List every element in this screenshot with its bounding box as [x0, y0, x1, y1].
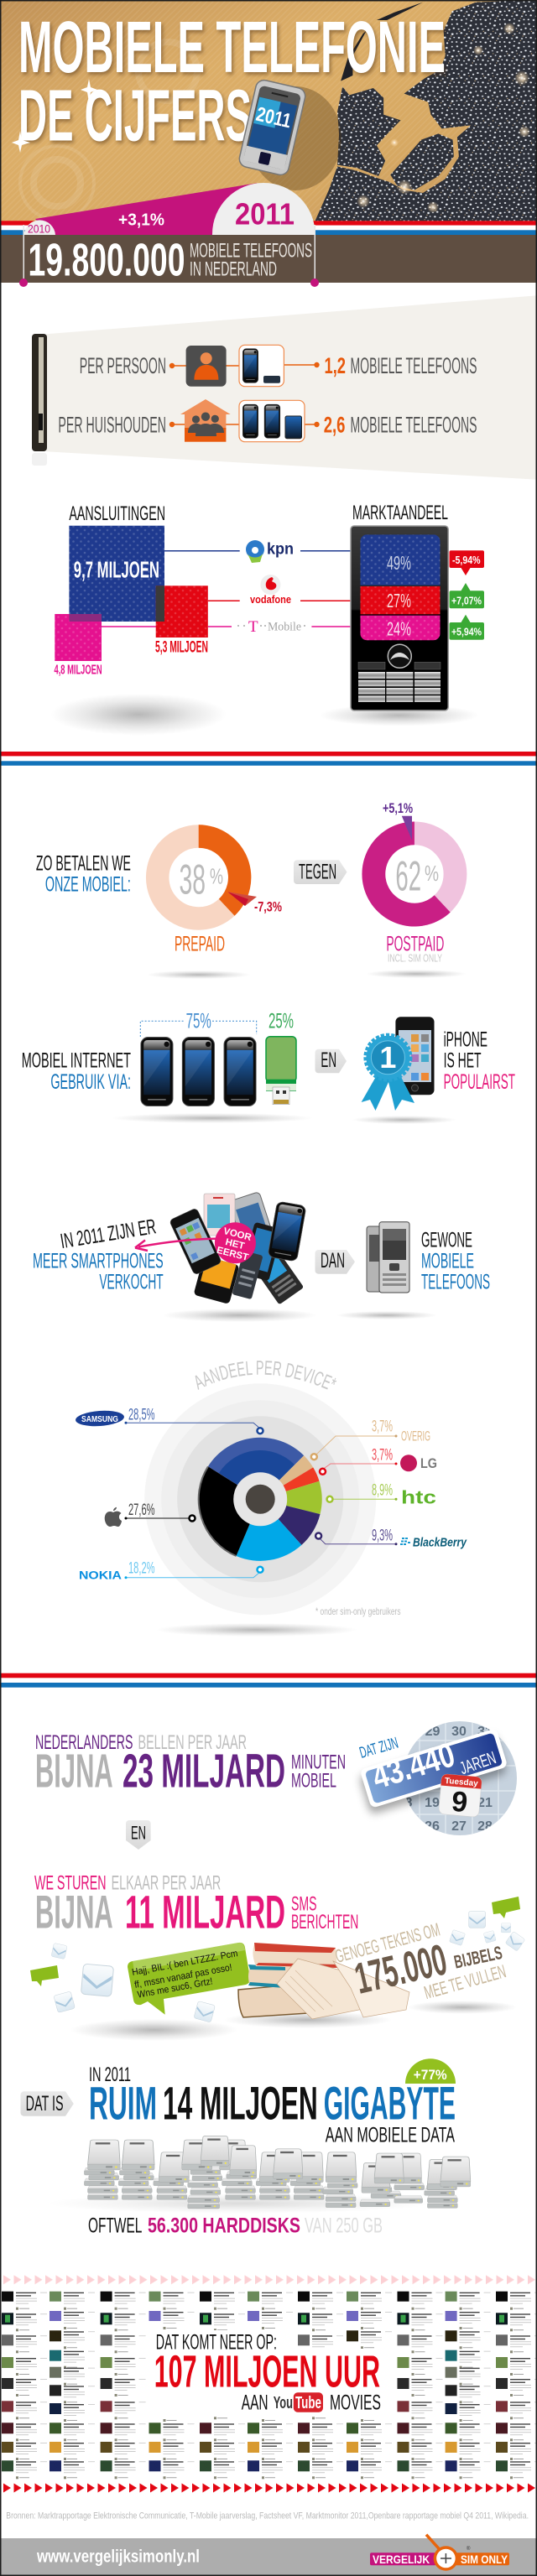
- percentage: %: [425, 861, 439, 886]
- value: 1,2: 1,2: [324, 353, 346, 378]
- badge: +77%: [405, 2058, 456, 2084]
- stat: 23 miljard minuten: MINUTEN: [291, 1751, 346, 1773]
- silver phone: [229, 1192, 274, 1249]
- icon: calendar circle: 29: [425, 1725, 440, 1739]
- connector lines: [102, 551, 361, 627]
- orange phone: [194, 1256, 239, 1304]
- stat: 11 miljard sms: [34, 1872, 358, 1939]
- logo: vergelijk sim only: SIM ONLY: [461, 2553, 508, 2566]
- tag: en: EN: [131, 1823, 146, 1844]
- callout: BlackBerry: [315, 1527, 467, 1549]
- arrow: [135, 1239, 216, 1251]
- smartphones cluster: [135, 1192, 317, 1322]
- stat: 11 miljard sms: 11 MILJARD: [125, 1886, 285, 1939]
- phone body: [351, 526, 448, 710]
- text: genoeg tekens om 175.000 bijbels: 175.000: [351, 1935, 451, 2004]
- total caption: [190, 240, 312, 280]
- iPhone tilted: [169, 1208, 222, 1275]
- callout: Overig: [311, 1418, 430, 1460]
- stat: 23 miljard minuten: 23 MILJARD: [123, 1745, 285, 1798]
- stat: 11 miljard sms: ELKAAR PER JAAR: [112, 1872, 221, 1895]
- map glare spots: [357, 23, 530, 213]
- callout: LG: 3,7%: [372, 1447, 393, 1465]
- icon: calendar circle: 30: [451, 1725, 467, 1739]
- SMS bubble: ff, mssn vanaaf pas osso!: [133, 1963, 233, 1991]
- logo: vergelijk sim only: ®: [467, 2546, 471, 2552]
- stat: 23 miljard minuten: [35, 1731, 346, 1798]
- row: per persoon: PER PERSOON: [80, 353, 166, 378]
- heading: in 2011 meer smartphones: VERKOCHT: [99, 1271, 164, 1294]
- pill: dan: [315, 1249, 355, 1274]
- internet devices: [112, 1010, 313, 1123]
- callout: Apple: [105, 1501, 195, 1527]
- heading: zo betalen we: ZO BETALEN WE: [36, 851, 131, 875]
- icon: USB stick: [266, 1037, 296, 1105]
- logo: T-Mobile: Mobile: [268, 621, 301, 634]
- change wedge: [402, 816, 412, 840]
- header banner: [0, 0, 537, 221]
- website: www.vergelijksimonly.nl: [36, 2547, 200, 2566]
- logo: HTC: htc: [401, 1487, 436, 1508]
- badge: voor het eerst: [215, 1222, 256, 1263]
- icon: calendar circle: 28: [477, 1819, 493, 1834]
- tag: en: [126, 1820, 151, 1850]
- logo: Vodafone: [250, 575, 291, 606]
- envelopes: [51, 1911, 525, 2022]
- change wedge: [227, 892, 257, 906]
- chart: aandeel per device: AANDEEL PER DEVICE*: [195, 1361, 336, 1390]
- glow behind phone: [249, 86, 341, 190]
- logo: YouTube: You: [274, 2394, 293, 2412]
- white title panel: [147, 2330, 394, 2416]
- stat: 11 miljard sms: SMS: [291, 1892, 317, 1915]
- callout: Overig: OVERIG: [401, 1429, 430, 1444]
- icon: calendar circle: [403, 1720, 520, 1837]
- heading: mobiel internet: MOBIEL INTERNET: [22, 1049, 131, 1073]
- callout: Samsung: [75, 1407, 263, 1434]
- flag stripes divider 3: [0, 1673, 537, 1688]
- logo: Nokia: NOKIA: [79, 1569, 122, 1582]
- pale triangle row: [3, 2275, 535, 2284]
- SMS bubble: [128, 1943, 250, 2015]
- share values: [387, 552, 411, 640]
- heading: in 2011 meer smartphones: MEER SMARTPHONES: [33, 1250, 164, 1273]
- total count bar: [0, 225, 537, 287]
- icon: calendar circle: 19: [425, 1796, 440, 1810]
- panel: phones per person and household: [32, 295, 537, 480]
- stat: 107 miljoen uur: DAT KOMT NEER OP:: [156, 2331, 277, 2355]
- square: T-Mobile: [55, 614, 102, 661]
- icon: day calendar: Tuesday: [445, 1777, 479, 1788]
- logo: Samsung: SAMSUNG: [81, 1415, 118, 1424]
- heading: mobiel internet: [22, 1049, 131, 1094]
- heading: in 2011 meer smartphones: IN 2011 ZIJN ER: [59, 1215, 158, 1253]
- keypad phone: [253, 1251, 304, 1304]
- pill: en: EN: [321, 1049, 336, 1072]
- growth wedge 2010 to 2011: [23, 183, 315, 235]
- callout: Nokia: 18,2%: [128, 1560, 155, 1578]
- stat: 23 miljard minuten: NEDERLANDERS: [35, 1731, 133, 1754]
- icon: calendar circle: 21: [477, 1796, 493, 1810]
- stat: 11 miljard sms: WE STUREN: [34, 1872, 106, 1895]
- logo: KPN: [246, 540, 294, 563]
- icon: harddisk stacks: [47, 2136, 471, 2214]
- pie: [199, 1438, 322, 1561]
- logo: BlackBerry: BlackBerry: [413, 1535, 467, 1549]
- sms illustration: [30, 1897, 525, 2041]
- text: oftwel 56.300 harddisks: OFTWEL: [88, 2214, 142, 2238]
- icon: day calendar: 9: [451, 1786, 469, 1819]
- percentage: 62: [395, 853, 421, 900]
- panel: aansluitingen chart: [50, 502, 361, 736]
- text: gewone mobiele telefoons: MOBIELE: [421, 1250, 474, 1273]
- text: iPhone is het populairst: [444, 1028, 515, 1094]
- pill: tegen: TEGEN: [299, 860, 336, 883]
- total caption: IN NEDERLAND: [190, 258, 277, 280]
- text: gewone mobiele telefoons: GEWONE: [421, 1229, 472, 1252]
- 2011 year: 2011: [235, 197, 295, 232]
- footnote: * onder sim-only gebruikers: [315, 1605, 401, 1617]
- row: per huishouden: [58, 399, 477, 442]
- phones box: [239, 400, 305, 442]
- sticker: [360, 1728, 508, 1808]
- icon: day calendar: [438, 1773, 482, 1819]
- phone screen segments: [360, 534, 440, 641]
- value: 2,6: 2,6: [324, 413, 345, 438]
- heading: MARKTAANDEEL: [352, 502, 448, 524]
- stat: 23 miljard minuten: MOBIEL: [291, 1770, 336, 1793]
- donut: prepaid: [147, 825, 282, 979]
- square: Vodafone: [156, 585, 208, 637]
- decorative ring: [20, 42, 197, 220]
- stat: ruim 14 miljoen gigabyte: 14 MILJOEN: [163, 2077, 318, 2130]
- text: genoeg tekens om 175.000 bijbels: BIJBELS: [452, 1942, 504, 1973]
- value Vodafone: 5,3 MILJOEN: [155, 638, 208, 656]
- badge: voor het eerst: EERST: [216, 1246, 249, 1263]
- stat: 11 miljard sms: BERICHTEN: [291, 1911, 358, 1933]
- dark middle phone: [232, 1251, 263, 1299]
- phone date: 2011: [254, 103, 294, 133]
- heading: mobiel internet: GEBRUIK VIA:: [50, 1070, 131, 1094]
- middle phone: [241, 1222, 283, 1281]
- stat: 107 miljoen uur: [154, 2331, 381, 2415]
- icon: regular phones: [336, 1222, 437, 1319]
- change value: -7,3%: [254, 899, 282, 915]
- phone navigation button: [388, 644, 411, 668]
- badge: T-Mobile change: +5,94%: [451, 626, 482, 638]
- rosette: [366, 1036, 409, 1080]
- black smartphone: [268, 1201, 306, 1262]
- 2010 arch: [23, 220, 55, 235]
- stat: 23 miljard minuten: BELLEN PER JAAR: [138, 1731, 247, 1754]
- 2011 arch: [212, 183, 315, 235]
- callout: LG: [320, 1447, 437, 1475]
- text: oftwel 56.300 harddisks: [88, 2214, 383, 2238]
- logo: T-Mobile: T: [248, 618, 258, 636]
- logo: Vodafone: vodafone: [250, 594, 291, 606]
- logo: vergelijk sim only: VERGELIJK: [373, 2553, 430, 2566]
- small green bubbles: [30, 1897, 520, 1986]
- share values: 27%: [387, 590, 411, 611]
- stat: 107 miljoen uur: MOVIES: [330, 2391, 381, 2415]
- logo: YouTube: [274, 2392, 323, 2412]
- flag stripes divider 2: [0, 752, 537, 766]
- total caption: MOBIELE TELEFOONS: [190, 240, 312, 263]
- phone keypad: [358, 662, 441, 702]
- stat: 23 miljard minuten: BIJNA: [35, 1745, 113, 1798]
- icon: calendar circle: 26: [425, 1819, 440, 1834]
- pink phone: [204, 1194, 235, 1236]
- stat: ruim 14 miljoen gigabyte: AAN MOBIELE DATA: [326, 2123, 455, 2147]
- icon: house with family: [180, 399, 231, 442]
- text: iPhone is het populairst: iPHONE: [444, 1028, 487, 1051]
- heading: AANSLUITINGEN: [69, 502, 165, 525]
- square: KPN: [69, 526, 164, 622]
- callout: BlackBerry: 9,3%: [372, 1527, 393, 1545]
- value T-Mobile: 4,8 MILJOEN: [54, 663, 102, 677]
- row: per huishouden: PER HUISHOUDEN: [58, 413, 166, 438]
- badge: T-Mobile change: [450, 615, 484, 640]
- badge: voor het eerst: VOOR: [222, 1226, 253, 1243]
- badge: +77%: +77%: [414, 2067, 447, 2083]
- pill: tegen: [294, 860, 347, 884]
- text: oftwel 56.300 harddisks: 56.300 HARDDISKS: [148, 2214, 300, 2238]
- label: PREPAID: [175, 932, 225, 955]
- badge: Vodafone change: +7,07%: [451, 595, 482, 607]
- value 25%: 25%: [268, 1010, 294, 1033]
- row: per persoon: [80, 345, 477, 387]
- 2010 year: 2010: [28, 221, 50, 235]
- footer bar: [0, 2535, 537, 2576]
- stat: ruim 14 miljoen gigabyte: IN 2011: [89, 2063, 131, 2086]
- badge: voor het eerst: HET: [224, 1237, 246, 1252]
- stat: ruim 14 miljoen gigabyte: [20, 2058, 456, 2147]
- panel: marktaandeel phone: [319, 502, 484, 726]
- phones box: [239, 345, 284, 387]
- text: iPhone is het populairst: IS HET: [444, 1049, 482, 1073]
- callout: Nokia: [79, 1560, 263, 1582]
- share values: 49%: [387, 552, 411, 574]
- caption: DAT ZIJN: [357, 1735, 400, 1762]
- bracket 75%: [140, 1021, 257, 1037]
- phones: [141, 1037, 256, 1106]
- callout: Samsung: 28,5%: [128, 1407, 155, 1424]
- icon: phone 2011: [237, 79, 307, 176]
- logo: Apple: [105, 1507, 122, 1527]
- icon: books: [238, 1943, 409, 2019]
- ribbon tails: [362, 1074, 414, 1111]
- icon: phone side view: [32, 334, 47, 466]
- stat: 107 miljoen uur: AAN: [242, 2391, 268, 2415]
- text: genoeg tekens om 175.000 bijbels: GENOEG TEKENS OM: [333, 1919, 442, 1967]
- logo: LG: LG: [420, 1455, 437, 1471]
- pill: dat is: DAT IS: [26, 2092, 64, 2115]
- SMS bubble: Wns me suc6, Grtz!: [137, 1976, 214, 2001]
- icon: calendar circle: 27: [451, 1819, 467, 1834]
- logo: vergelijk sim only: [370, 2535, 509, 2569]
- pill: dan: DAN: [321, 1249, 345, 1272]
- icon: person: [186, 346, 227, 387]
- heading: zo betalen we: [36, 851, 131, 896]
- heading: in 2011 meer smartphones: [33, 1215, 164, 1294]
- chart title: [198, 1375, 337, 1394]
- percentage: %: [210, 863, 223, 888]
- chart: aandeel per device: [76, 1361, 467, 1636]
- donut: postpaid: [362, 800, 467, 978]
- background rings: [144, 1383, 376, 1615]
- badge: KPN change: -5,94%: [452, 554, 481, 566]
- sublabel: INCL. SIM ONLY: [388, 952, 442, 965]
- years unit: JAREN: [457, 1748, 498, 1778]
- callout: Overig: 3,7%: [372, 1418, 393, 1436]
- chart shadow: [156, 1623, 357, 1637]
- logo: KPN: kpn: [267, 541, 294, 559]
- logo: BlackBerry: [400, 1535, 467, 1549]
- stat: ruim 14 miljoen gigabyte: RUIM: [89, 2077, 157, 2130]
- callout: Apple: 27,6%: [128, 1501, 155, 1519]
- logo: Samsung: [75, 1409, 125, 1428]
- logo: YouTube: Tube: [295, 2394, 321, 2412]
- icon: iPhone with ribbon: [352, 1017, 456, 1124]
- years value: 43.440: [368, 1735, 459, 1797]
- change value: +5,1%: [383, 800, 413, 816]
- flag stripes: [0, 221, 537, 235]
- callout: HTC: 8,9%: [372, 1482, 393, 1500]
- callout: dat zijn 43.440 jaren: [357, 1728, 508, 1819]
- title: [18, 7, 446, 157]
- percentage: 38: [180, 856, 206, 903]
- text: oftwel 56.300 harddisks: VAN 250 GB: [305, 2214, 383, 2238]
- pill: dat is: [20, 2091, 74, 2116]
- share values: 24%: [387, 618, 411, 640]
- icon: calendar circle: 31: [477, 1725, 493, 1739]
- SMS bubble: Hajj, BIL :( ben LTZZZ. Pcm: [131, 1949, 238, 1978]
- badge: KPN change: [450, 550, 484, 575]
- map of the Netherlands: [315, 0, 537, 221]
- logo: T-Mobile: [237, 618, 305, 636]
- icon: sparkles on title: [12, 79, 267, 153]
- value KPN: 9,7 MILJOEN: [74, 556, 159, 582]
- YouTube video grid: [2, 2292, 537, 2479]
- badge: Vodafone change: [450, 583, 484, 608]
- callout: HTC: [327, 1482, 436, 1508]
- value 75%: 75%: [186, 1010, 211, 1033]
- text: gewone mobiele telefoons: [421, 1229, 490, 1294]
- red triangle row: [3, 2483, 535, 2493]
- total number: 19.800.000: [29, 233, 185, 285]
- title: DE CIJFERS: [18, 75, 252, 157]
- icon: calendar circle: 8: [405, 1796, 413, 1810]
- growth percentage: +3,1%: [118, 211, 164, 229]
- heading: zo betalen we: ONZE MOBIEL:: [45, 872, 131, 896]
- label: POSTPAID: [386, 932, 444, 955]
- rank number: 1: [379, 1040, 396, 1075]
- stat: 11 miljard sms: BIJNA: [35, 1886, 113, 1939]
